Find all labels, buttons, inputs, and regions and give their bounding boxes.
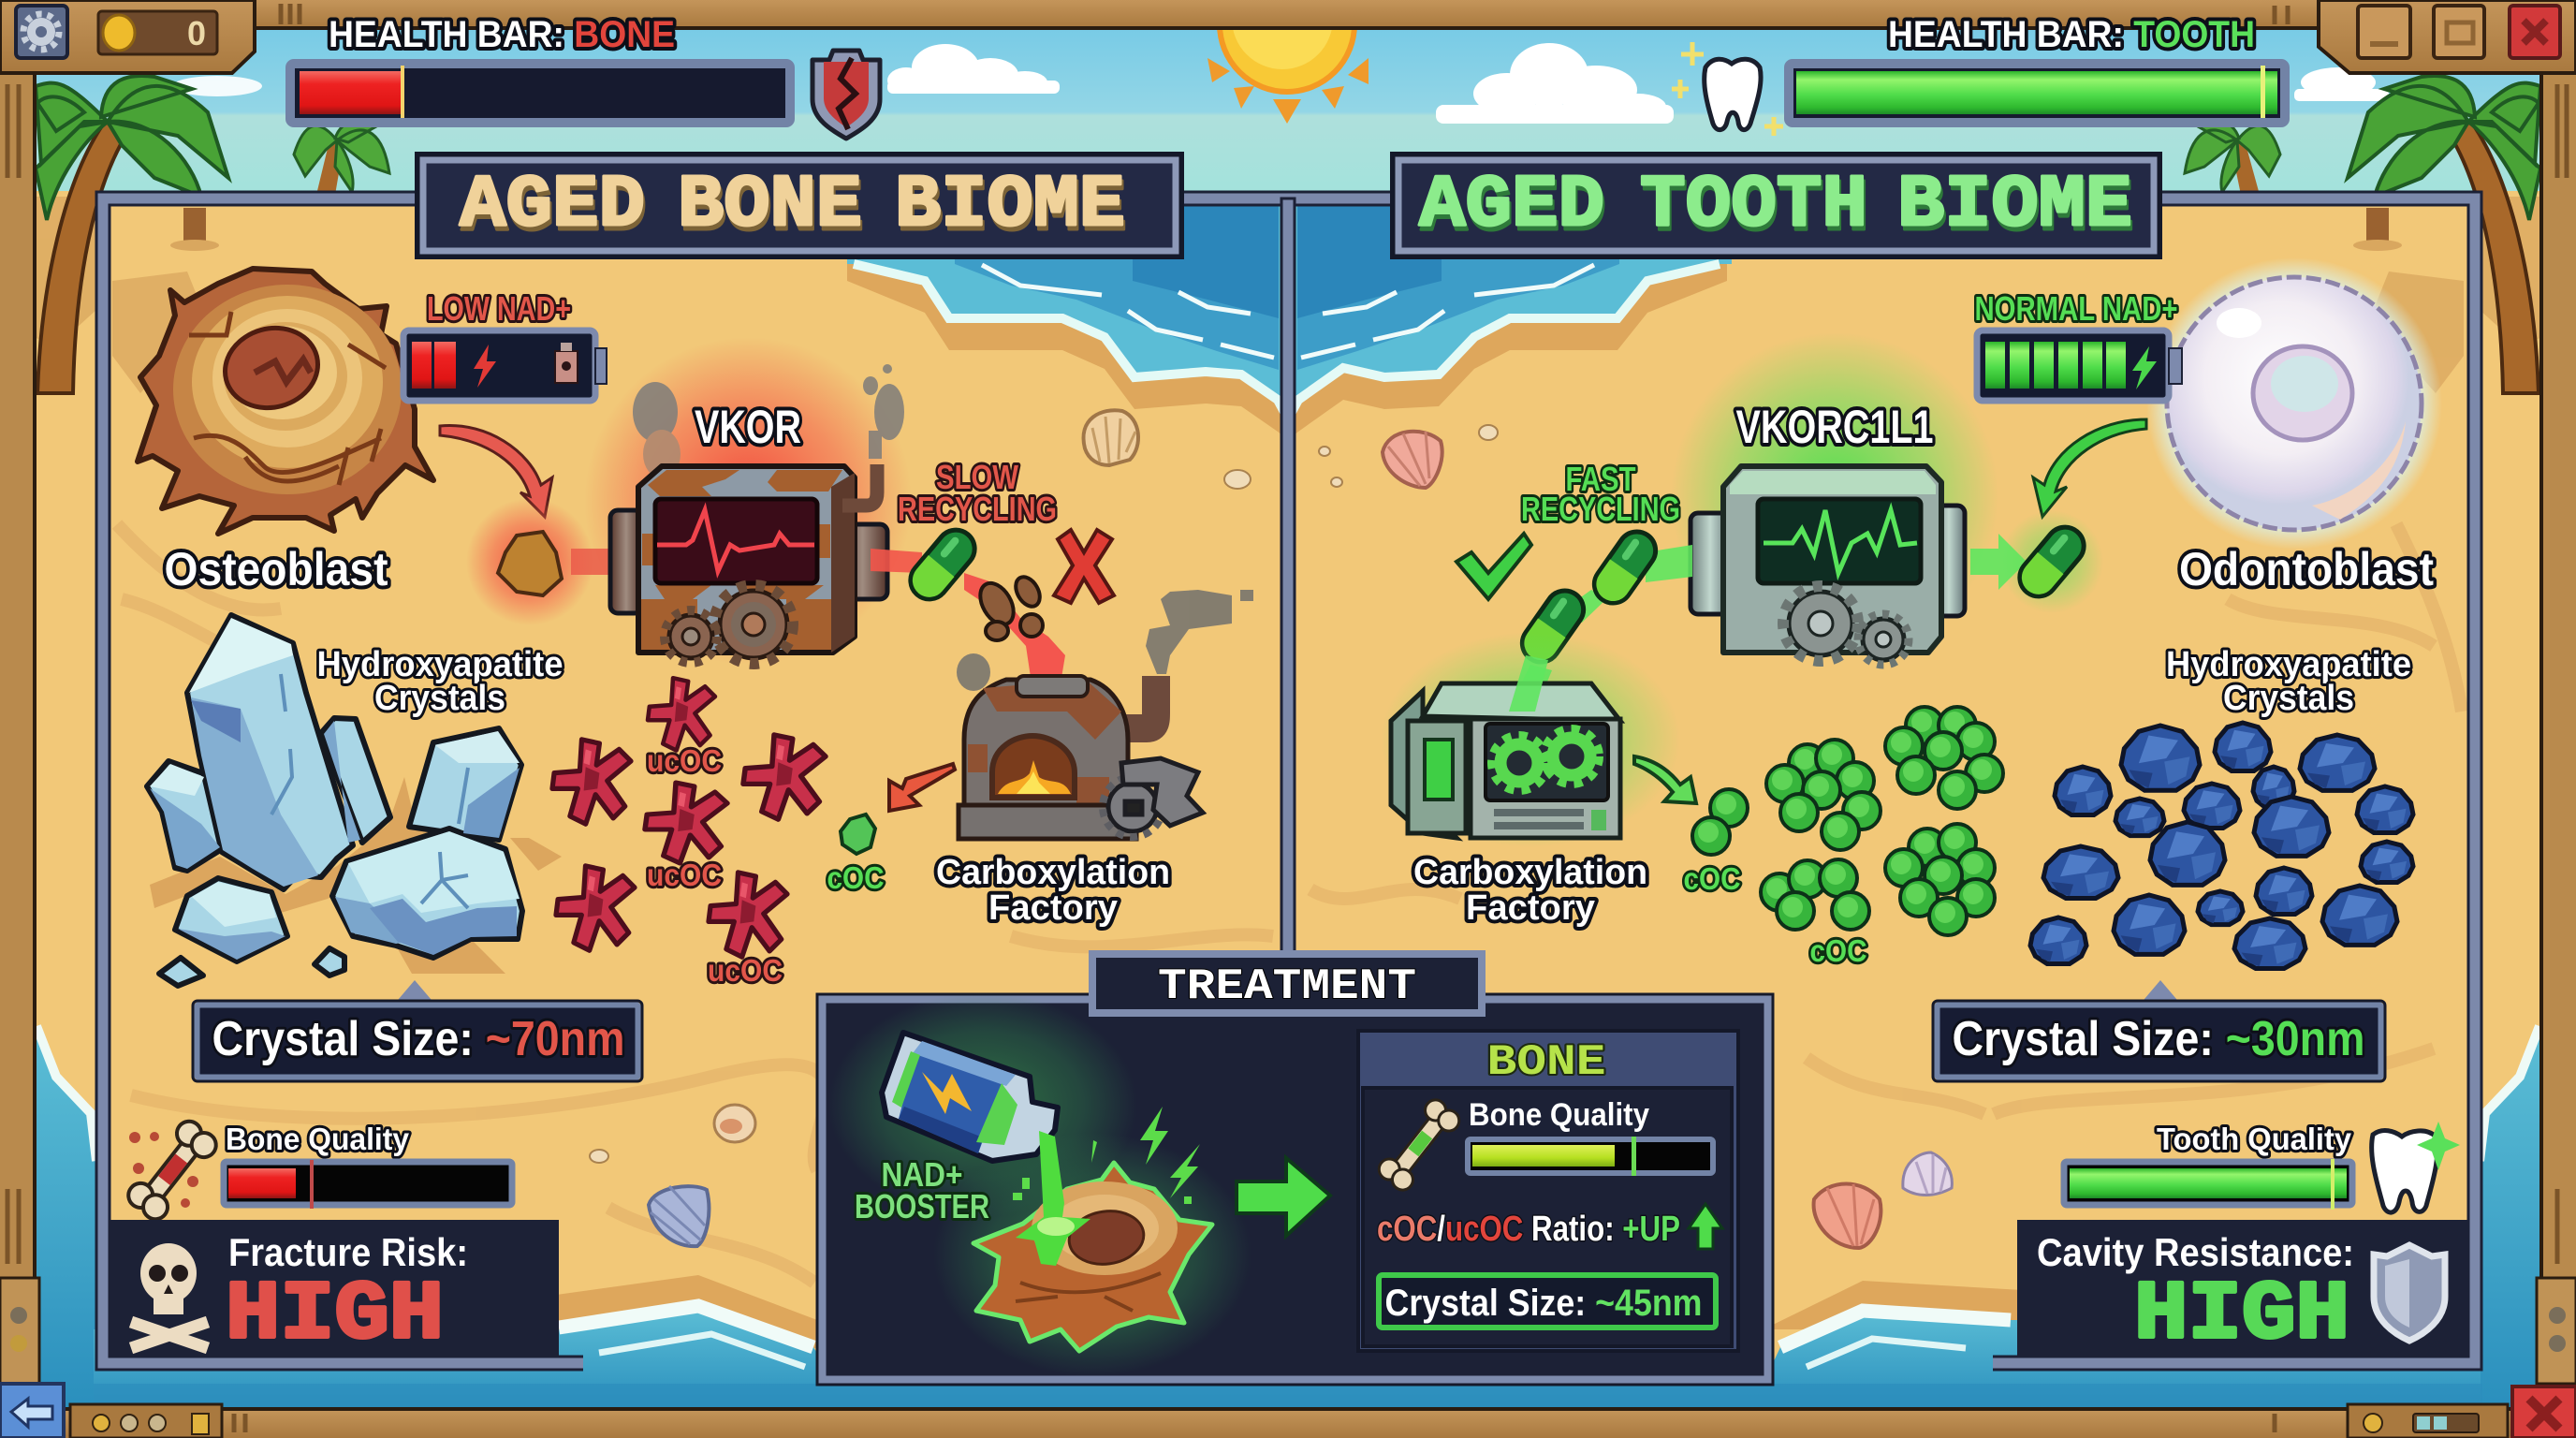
small product nugget bbox=[498, 532, 562, 595]
ucOC labels: ucOC bbox=[647, 858, 722, 892]
crystal size box: bone bbox=[193, 980, 642, 1081]
base bbox=[959, 805, 1136, 839]
glow bbox=[2146, 257, 2442, 550]
gears bbox=[1492, 729, 1599, 790]
pipe bbox=[842, 464, 877, 506]
cOC label: cOC bbox=[827, 860, 884, 895]
crystal shadow on sand bbox=[150, 777, 562, 974]
bar fill bbox=[228, 1168, 296, 1198]
callout: crystal size: Crystal Size: ~45nm bbox=[1385, 1283, 1702, 1324]
icon: bolt bbox=[474, 345, 496, 388]
health bar: bone bbox=[290, 14, 880, 139]
check mark bbox=[1456, 534, 1531, 599]
pistons bbox=[1690, 506, 1965, 616]
label: Carboxylation bbox=[1413, 853, 1647, 892]
label: carboxylation factory: Carboxylation bbox=[936, 853, 1170, 892]
treated osteoblast bbox=[973, 1163, 1212, 1351]
label: Bone Quality bbox=[226, 1122, 410, 1156]
label: Factory bbox=[1466, 888, 1595, 928]
title: aged tooth biome: TOOTH bbox=[1640, 163, 1867, 247]
icon: cracked bone bbox=[124, 1116, 221, 1225]
red glow bbox=[584, 337, 912, 665]
shell bbox=[1977, 330, 2182, 401]
chimney pipe bbox=[1114, 676, 1156, 728]
output pill bbox=[2012, 520, 2091, 604]
top bbox=[1423, 683, 1620, 721]
low NAD+ battery bbox=[403, 289, 607, 401]
label: VKOR: VKOR bbox=[695, 401, 801, 453]
icon: tooth with sparkle bbox=[2372, 1122, 2460, 1212]
icon: skull and crossbones bbox=[131, 1243, 208, 1348]
title: aged tooth biome: BIOME bbox=[1897, 163, 2132, 247]
output pill glow bbox=[2000, 510, 2103, 613]
arrow: treatment result bbox=[1237, 1158, 1330, 1236]
main panel frame with centre divider bbox=[103, 198, 2475, 1363]
cluster 4 bbox=[1761, 859, 1869, 930]
sparks bbox=[1013, 1107, 1200, 1204]
label: RECYCLING bbox=[1521, 490, 1680, 528]
label: low NAD+: LOW NAD+ bbox=[427, 289, 571, 328]
crumbs bbox=[973, 573, 1045, 640]
label: NAD+ booster: BOOSTER bbox=[855, 1187, 989, 1225]
label: VKORC1L1 bbox=[1735, 401, 1934, 453]
shells and pebbles bbox=[590, 410, 1952, 1248]
rust patches bbox=[968, 680, 1121, 805]
beam bbox=[1646, 545, 1692, 582]
tab: treatment: TREATMENT bbox=[1158, 962, 1416, 1011]
icon: settings gear bbox=[16, 6, 67, 58]
bar track bbox=[290, 64, 790, 123]
heartbeat line bbox=[657, 510, 814, 571]
bar bbox=[224, 1162, 512, 1205]
label: Hydroxyapatite bbox=[316, 645, 564, 684]
sub-panel: bone result bbox=[1358, 1031, 1738, 1351]
title: aged tooth biome bbox=[1394, 155, 2159, 256]
nucleus bbox=[2253, 346, 2352, 440]
right side shadow bbox=[831, 473, 855, 653]
screen bbox=[655, 499, 817, 583]
VKOR rusty machine bbox=[466, 337, 912, 665]
label: Hydroxyapatite bbox=[2166, 645, 2411, 684]
bar fill bbox=[300, 71, 402, 114]
label: slow recycling: SLOW bbox=[936, 458, 1018, 496]
glow bbox=[1671, 332, 1998, 660]
bottom left HUD: back button and icons bbox=[0, 1384, 222, 1438]
red X bbox=[1054, 530, 1114, 603]
label: NAD+ booster: NAD+ bbox=[882, 1155, 962, 1194]
sun bbox=[1208, 0, 1368, 124]
text: fracture risk: Fracture Risk: bbox=[228, 1230, 468, 1274]
icon: shield bbox=[2374, 1245, 2445, 1341]
label: FAST bbox=[1565, 460, 1636, 498]
bottom right HUD: close button and icons bbox=[2348, 1387, 2576, 1438]
label: slow recycling: RECYCLING bbox=[898, 490, 1057, 528]
battery shell bbox=[403, 330, 607, 401]
bar: bone quality bbox=[1468, 1137, 1713, 1176]
text: ratio: cOC/ucOC Ratio: +UP bbox=[1377, 1210, 1680, 1249]
ucOC labels bbox=[647, 743, 783, 988]
label: NORMAL NAD+ bbox=[1975, 289, 2177, 328]
title: aged bone biome: AGED bbox=[460, 163, 645, 247]
crystal facets bbox=[150, 618, 520, 960]
smoke bbox=[633, 364, 904, 478]
carboxylation factory: tooth side bbox=[1381, 632, 1696, 928]
gears bbox=[665, 585, 793, 664]
cOC green clusters: tooth side bbox=[1683, 707, 2003, 968]
palm tree: small left bbox=[294, 121, 389, 195]
bar fill bbox=[1796, 71, 2277, 114]
front bbox=[1471, 719, 1620, 838]
pills bbox=[1588, 524, 1662, 610]
sand ripples bbox=[117, 524, 2462, 1283]
cluster 3 bbox=[1885, 824, 1995, 935]
beam into machine bbox=[571, 549, 612, 575]
screen bbox=[1486, 724, 1608, 800]
ocean: centre bay bbox=[847, 197, 1732, 440]
pouring liquid bbox=[1016, 1131, 1090, 1266]
palm shadows bbox=[34, 197, 2542, 393]
output arrow bbox=[1970, 534, 2027, 590]
heartbeat bbox=[1764, 510, 1917, 573]
vents bbox=[1494, 809, 1606, 830]
battery cells bbox=[412, 342, 456, 389]
fast recycling flow bbox=[1456, 460, 2103, 702]
hydroxyapatite crystals: tooth side bbox=[2030, 645, 2413, 968]
ucOC labels: ucOC bbox=[708, 953, 783, 988]
screen bbox=[1758, 499, 1921, 583]
heading: bone: BONE bbox=[1486, 1038, 1606, 1087]
cluster 1 bbox=[1766, 740, 1881, 850]
top right HUD: window buttons bbox=[2319, 0, 2576, 73]
cOC labels: cOC bbox=[1683, 861, 1741, 896]
cluster 2 bbox=[1885, 707, 2003, 809]
machine side pistons bbox=[610, 510, 887, 613]
heading: health bar bone: HEALTH BAR: BONE bbox=[329, 14, 675, 55]
icon: NAD+ booster bottle bbox=[882, 1033, 1058, 1161]
label: Tooth Quality bbox=[2157, 1122, 2352, 1156]
carboxylation furnace bbox=[889, 590, 1253, 928]
title: aged bone biome: BONE bbox=[678, 163, 862, 247]
top left HUD: settings and coin counter bbox=[0, 0, 255, 73]
bone quality meter bbox=[124, 1116, 512, 1225]
body bbox=[1723, 466, 1941, 653]
highlights bbox=[2217, 308, 2406, 520]
furnace body bbox=[964, 680, 1128, 814]
beam down bbox=[1515, 590, 1606, 702]
glow around booster and cell bbox=[828, 992, 1251, 1376]
VKORC1L1 machine bbox=[1671, 332, 1998, 665]
label: carboxylation factory: Factory bbox=[988, 888, 1118, 928]
cell sprite bbox=[138, 269, 433, 534]
output tube bbox=[1509, 655, 1548, 712]
text: cavity resistance: Cavity Resistance: bbox=[2037, 1230, 2354, 1274]
icon: healthy tooth bbox=[1672, 42, 1783, 136]
crumbs bbox=[129, 1132, 198, 1208]
ucOC labels: ucOC bbox=[647, 743, 722, 778]
fire bbox=[998, 760, 1071, 794]
label: Crystals bbox=[2223, 679, 2354, 718]
smoke bbox=[957, 590, 1253, 691]
arrow: osteoblast to VKOR bbox=[440, 425, 552, 517]
pill bbox=[903, 522, 982, 607]
rubble gears bbox=[1103, 758, 1203, 837]
label: osteoblast: Osteoblast bbox=[165, 543, 388, 595]
crystal cracks bbox=[271, 674, 468, 908]
tab: treatment bbox=[1092, 954, 1482, 1013]
hydroxyapatite crystals: bone side bbox=[147, 615, 564, 986]
rim bbox=[1017, 676, 1088, 697]
ocean: bottom and side shoreline bbox=[34, 1020, 2542, 1409]
palm tree: small right bbox=[2185, 121, 2280, 195]
cells bbox=[1985, 342, 2126, 389]
broken flow beam bbox=[964, 573, 1065, 689]
furnace door bbox=[992, 736, 1075, 798]
label: Odontoblast bbox=[2179, 543, 2434, 595]
orange output arrow bbox=[889, 764, 955, 811]
cavity resistance panel bbox=[2017, 1220, 2468, 1362]
bar track bbox=[1789, 64, 2285, 123]
clouds bbox=[172, 43, 2389, 124]
machine body bbox=[638, 466, 855, 653]
title: aged tooth biome: AGED bbox=[1419, 163, 1604, 247]
odontoblast cell bbox=[2146, 257, 2442, 595]
green arrow bbox=[1634, 756, 1696, 803]
crystal cluster outlines bbox=[147, 615, 522, 986]
palm tree: large right bbox=[2348, 76, 2540, 393]
fracture risk panel bbox=[109, 1220, 559, 1362]
bar bbox=[2064, 1162, 2352, 1205]
cOC labels: cOC bbox=[1810, 933, 1866, 968]
crystal size box: tooth bbox=[1933, 980, 2385, 1081]
crystal size box: bone: Crystal Size: ~70nm bbox=[212, 1012, 625, 1066]
gears bbox=[1783, 586, 1909, 665]
side panel bbox=[1391, 691, 1456, 838]
cOC labels bbox=[1683, 861, 1866, 968]
icon: small bottle bbox=[555, 343, 578, 383]
text: high: HIGH bbox=[226, 1269, 444, 1362]
crystal size box: tooth: Crystal Size: ~30nm bbox=[1953, 1012, 2364, 1066]
normal NAD+ battery bbox=[1975, 289, 2182, 401]
cOC blob bbox=[841, 814, 875, 854]
single pair bbox=[1692, 789, 1748, 855]
ucOC stars bbox=[552, 678, 826, 957]
palm tree: large left bbox=[36, 76, 228, 393]
treatment panel bbox=[817, 954, 1773, 1385]
title: aged bone biome bbox=[418, 155, 1180, 256]
slow recycling flow bbox=[871, 458, 1114, 689]
cell body bbox=[2167, 277, 2422, 530]
bolt bbox=[2132, 346, 2157, 389]
icon: healing bone bbox=[1375, 1095, 1463, 1195]
label: Crystals bbox=[374, 679, 505, 718]
icon: up arrow bbox=[1689, 1204, 1722, 1249]
fill bbox=[2070, 1168, 2347, 1198]
text: bone quality: Bone Quality bbox=[1469, 1097, 1649, 1133]
arrow: odontoblast to pill bbox=[2033, 419, 2146, 517]
title: aged bone biome: BIOME bbox=[895, 163, 1125, 247]
health bar: tooth bbox=[1672, 14, 2285, 136]
osteoblast cell bbox=[138, 269, 433, 595]
top highlight bbox=[1730, 471, 1936, 494]
cOC and ucOC proteins: bone side bbox=[552, 678, 884, 988]
tooth quality meter bbox=[2064, 1122, 2460, 1212]
glow bbox=[1381, 632, 1680, 847]
icon: broken shield bbox=[812, 51, 880, 139]
coin counter bbox=[98, 11, 217, 54]
small blue gems bbox=[2030, 723, 2413, 968]
beam out bbox=[871, 549, 922, 573]
coin counter: 0 bbox=[187, 14, 206, 52]
text: high: HIGH bbox=[2134, 1269, 2349, 1362]
rust patches bbox=[641, 470, 842, 650]
heading: health bar tooth: HEALTH BAR: TOOTH bbox=[1888, 14, 2255, 55]
palm stumps behind panel bbox=[170, 208, 2402, 251]
glow around output bbox=[466, 498, 593, 625]
